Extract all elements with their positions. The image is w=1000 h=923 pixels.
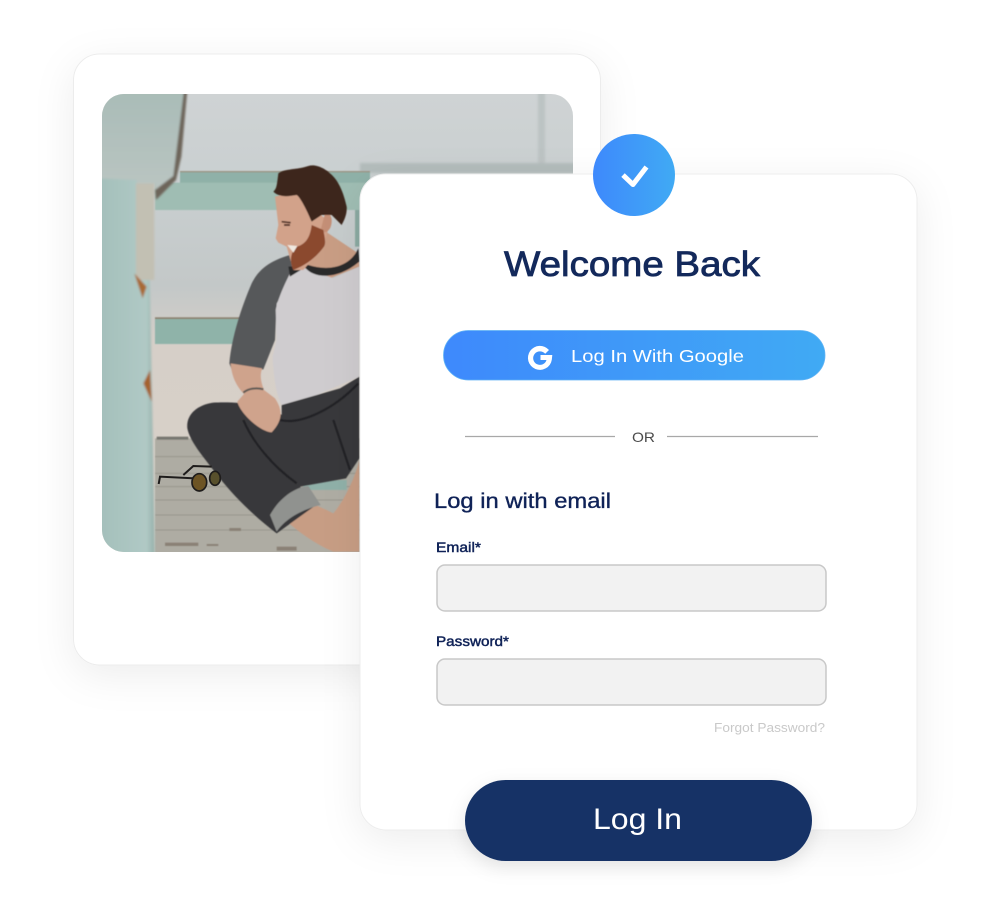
email field: Email* [436,539,482,555]
check badge [593,134,675,216]
man: collar [288,248,359,277]
man: bare leg and foot [285,460,359,552]
Google login button: Log In With Google [571,346,744,366]
Log In button: Log In [593,803,682,836]
sunglasses [159,466,220,491]
man: mouth [287,245,297,253]
foreground post [97,90,187,557]
man: ear [321,213,332,232]
back rails [155,171,372,344]
email field [436,539,826,611]
forgot password link: Forgot Password? [714,721,825,735]
man: shirt [273,267,359,405]
photo card [74,54,600,665]
heading: Welcome Back [504,245,761,284]
man: rolled cuff [270,486,321,532]
Log In button [465,780,812,861]
photo: smiling man sitting on a deck [97,90,580,558]
login card [360,134,917,861]
man: hair [273,165,347,225]
man: face [275,194,330,270]
man: sleeve [229,255,293,373]
man: eye and brow [282,222,291,225]
man: neck [305,230,359,278]
icon: Google G [528,346,552,370]
man: jeans [187,377,359,533]
password field [436,633,826,705]
deck boards [155,437,372,558]
distant post and rail [360,90,580,173]
man: beard [291,225,325,270]
OR divider: OR [632,429,655,445]
man [187,165,359,552]
Google login button [444,330,825,380]
man: arm and hand [231,363,281,432]
subheading: Log in with email [434,490,611,513]
password field: Password* [436,633,510,649]
